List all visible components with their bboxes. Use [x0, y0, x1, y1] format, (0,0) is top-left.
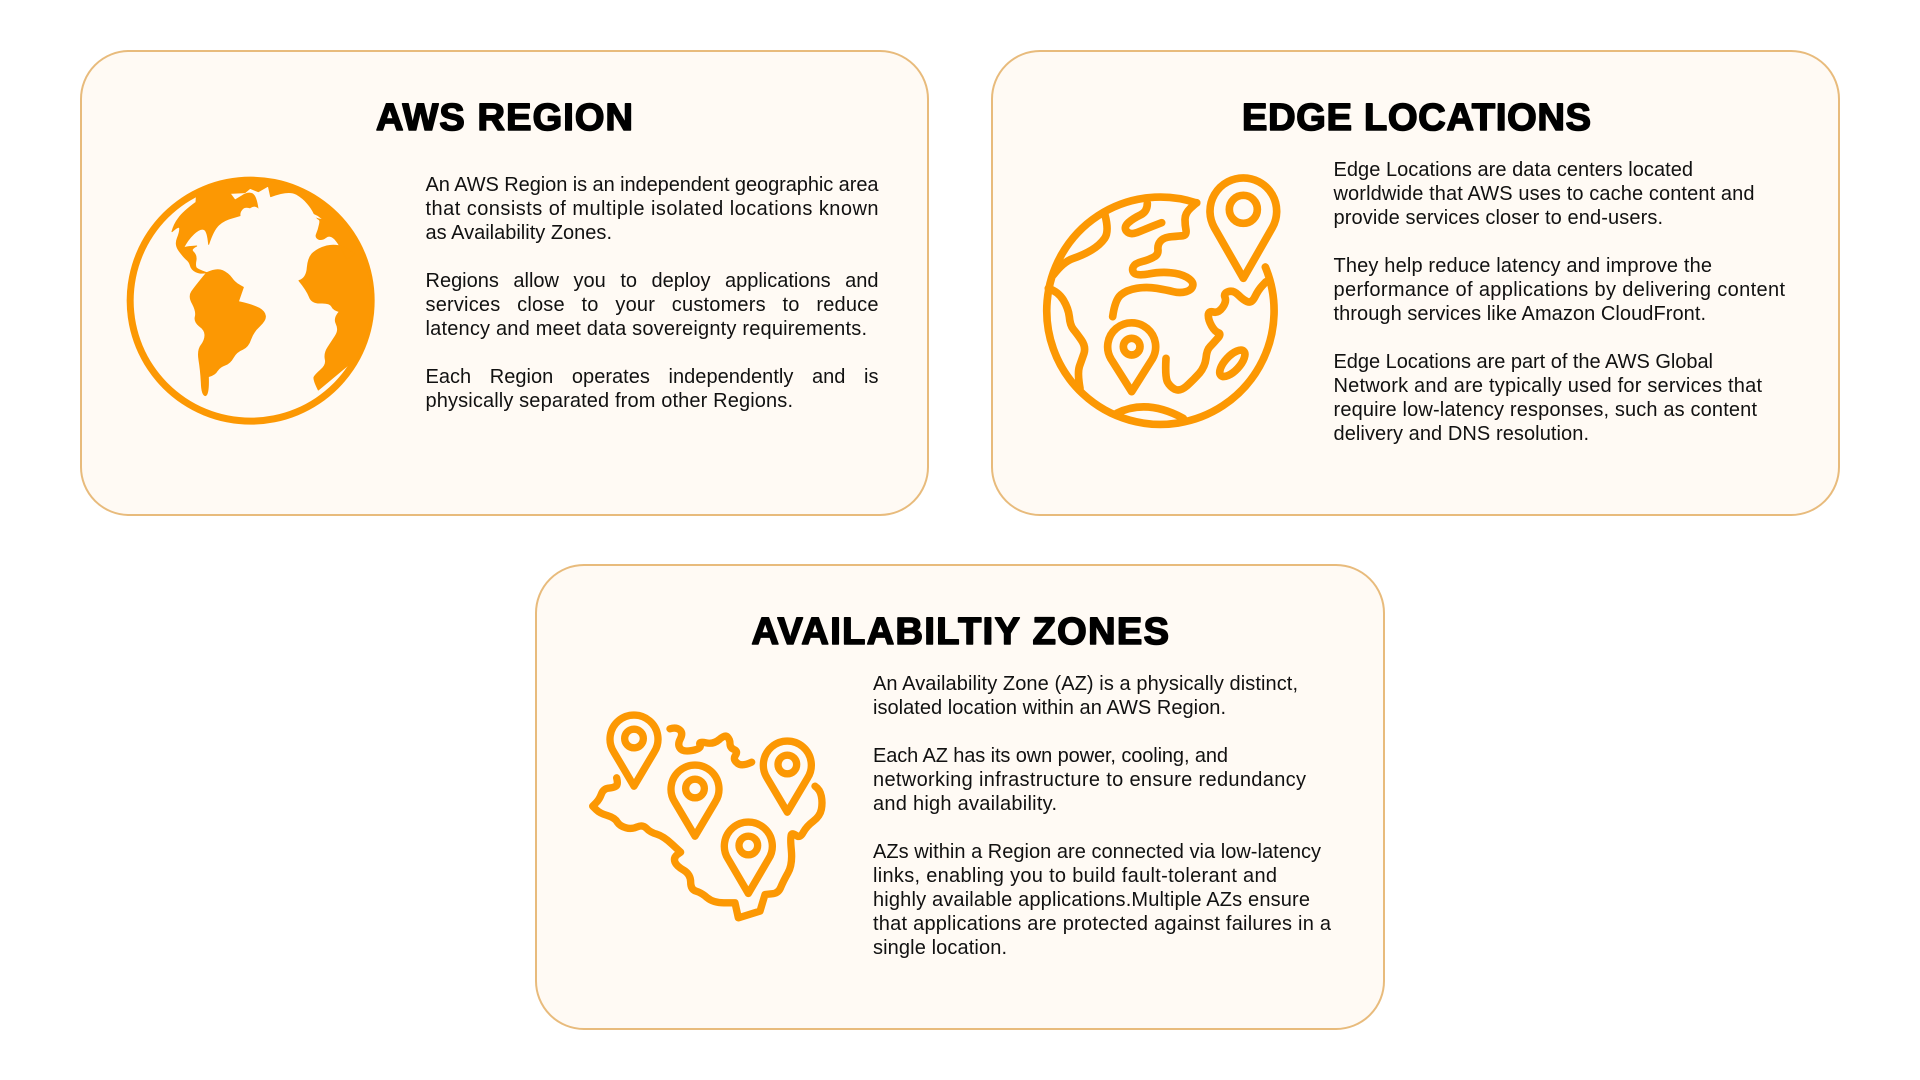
text: Availability Zones description: Each AZ has its own power, cooling, and	[873, 745, 1228, 767]
text: AWS Region description: Regions allow you to deploy applications and	[426, 270, 878, 292]
text: Edge Locations description	[1332, 159, 1785, 445]
heading: Edge Locations: EDGE LOCATIONS	[1242, 97, 1591, 139]
icon: filled globe	[127, 177, 375, 425]
text: AWS Region description: that consists of multiple isolated locations known	[426, 198, 878, 220]
panel: Edge Locations	[992, 51, 1839, 515]
icon: map with four location pins	[593, 715, 822, 918]
text: AWS Region description: as Availability Zones.	[426, 222, 612, 244]
text: Edge Locations description: delivery and DNS resolution.	[1334, 423, 1589, 445]
text: Availability Zones description: isolated location within an AWS Region.	[873, 697, 1226, 719]
text: AWS Region description: latency and meet data sovereignty requirements.	[426, 318, 867, 340]
text: Edge Locations description: Edge Locations are part of the AWS Global	[1334, 351, 1713, 373]
text: Availability Zones description: links, enabling you to build fault-tolerant and	[873, 865, 1277, 887]
text: Edge Locations description: through services like Amazon CloudFront.	[1334, 303, 1706, 325]
icon: globe with location pins	[1047, 178, 1277, 424]
text: Availability Zones description: networking infrastructure to ensure redundancy	[873, 769, 1306, 791]
text: Availability Zones description: An Availability Zone (AZ) is a physically distinct,	[873, 673, 1298, 695]
text: Availability Zones description: that applications are protected against failures in a	[873, 913, 1332, 935]
text: Edge Locations description: worldwide that AWS uses to cache content and	[1332, 183, 1754, 205]
text: Availability Zones description: single location.	[873, 937, 1007, 959]
text: AWS Region description: services close to your customers to reduce	[426, 294, 878, 316]
panel: AWS Region	[81, 51, 928, 515]
text: Edge Locations description: performance of applications by delivering content	[1334, 279, 1785, 301]
text: AWS Region description: Each Region operates independently and is	[426, 366, 878, 388]
text: Edge Locations description: Edge Locations are data centers located	[1334, 159, 1693, 181]
heading: AWS Region: AWS REGION	[376, 97, 633, 139]
heading: Availabiltiy Zones: AVAILABILTIY ZONES	[752, 611, 1169, 653]
text: Availability Zones description	[873, 673, 1332, 959]
panel: Availability Zones	[536, 565, 1384, 1029]
text: Edge Locations description: They help reduce latency and improve the	[1334, 255, 1712, 277]
text: Availability Zones description: AZs within a Region are connected via low-latency	[873, 841, 1321, 863]
text: Edge Locations description: provide services closer to end-users.	[1334, 207, 1663, 229]
text: Edge Locations description: require low-latency responses, such as content	[1334, 399, 1757, 421]
text: Availability Zones description: and high availability.	[873, 793, 1057, 815]
text: Availability Zones description: highly available applications.Multiple AZs ensure	[873, 889, 1310, 911]
text: Edge Locations description: Network and are typically used for services that	[1334, 375, 1762, 397]
text: AWS Region description: physically separated from other Regions.	[426, 390, 793, 412]
text: AWS Region description	[426, 174, 879, 412]
text: AWS Region description: An AWS Region is an independent geographic area	[426, 174, 879, 196]
